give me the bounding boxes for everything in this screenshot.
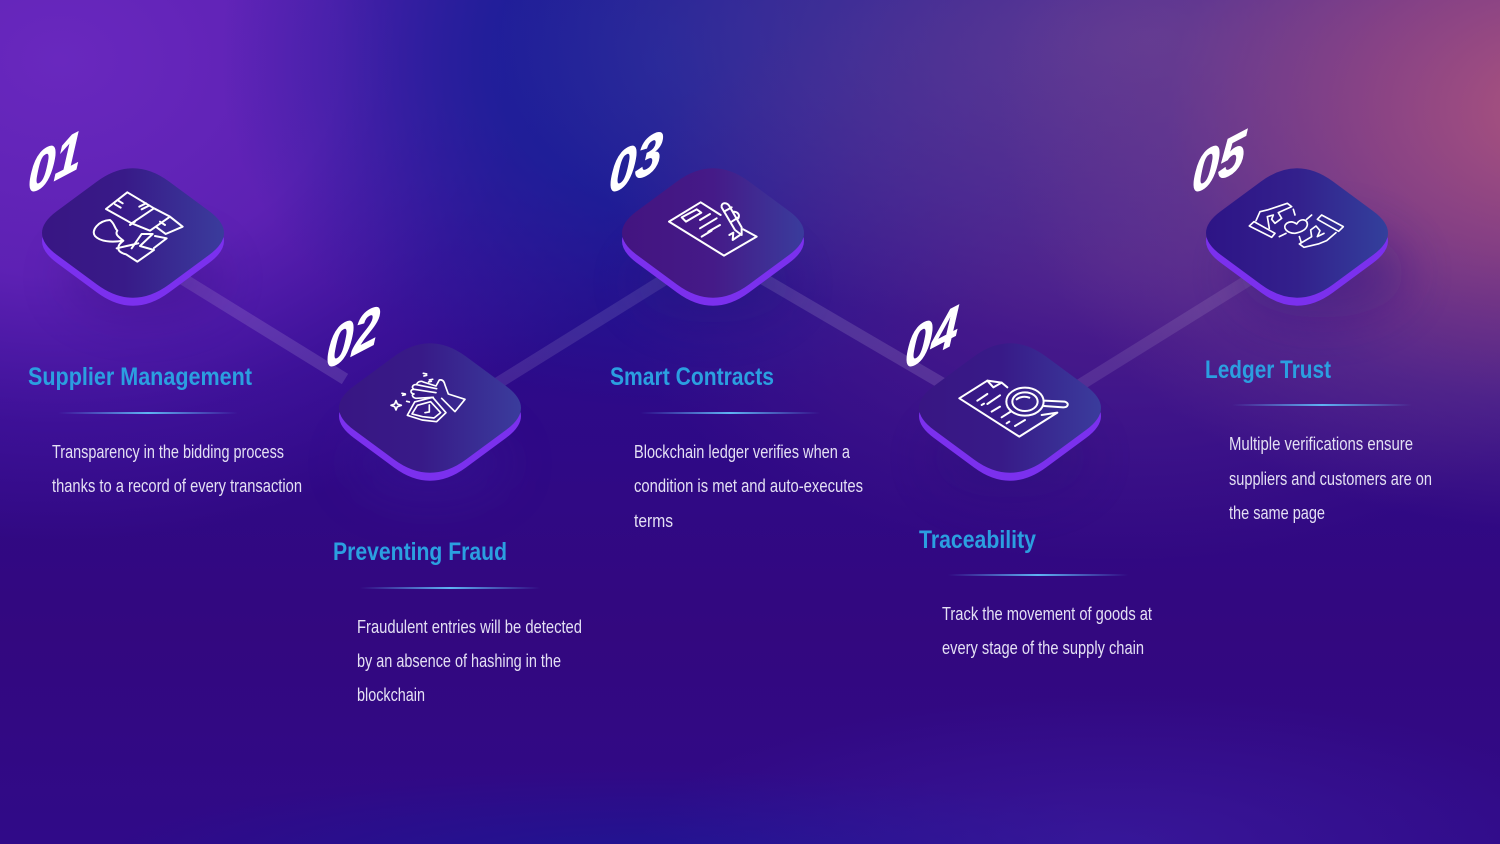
platform 5 xyxy=(1206,168,1407,318)
platform 4 xyxy=(919,343,1101,498)
divider xyxy=(1232,404,1412,406)
description xyxy=(634,442,863,531)
description xyxy=(942,604,1152,658)
heading: Supplier Management xyxy=(28,363,253,391)
description xyxy=(357,617,582,705)
description: terms xyxy=(634,511,673,531)
description: Multiple verifications ensure xyxy=(1229,434,1413,454)
divider xyxy=(58,412,238,414)
description: Transparency in the bidding process xyxy=(52,442,284,462)
divider xyxy=(360,587,540,589)
heading: Preventing Fraud xyxy=(333,538,507,566)
platform 2 xyxy=(339,343,521,503)
connector lines xyxy=(175,274,1255,388)
description: the same page xyxy=(1229,503,1325,523)
description: Track the movement of goods at xyxy=(942,604,1152,624)
description: every stage of the supply chain xyxy=(942,638,1144,658)
number 05: 05 xyxy=(1190,118,1249,208)
icon: hands and heart xyxy=(1249,203,1343,247)
description xyxy=(1229,434,1432,523)
description: Blockchain ledger verifies when a xyxy=(634,442,851,462)
divider xyxy=(948,574,1128,576)
description xyxy=(52,442,302,496)
platform 1 xyxy=(42,168,224,318)
description: by an absence of hashing in the xyxy=(357,651,561,671)
step 3: smart contracts xyxy=(607,118,863,531)
heading: Ledger Trust xyxy=(1205,356,1332,384)
number 04: 04 xyxy=(903,293,961,383)
step 4: traceability xyxy=(903,293,1152,658)
description: Fraudulent entries will be detected xyxy=(357,617,582,637)
heading: Smart Contracts xyxy=(610,363,774,391)
icon: document and magnifier xyxy=(959,381,1068,437)
divider xyxy=(640,412,820,414)
description: condition is met and auto-executes xyxy=(634,476,863,496)
icon: supplier with boxes xyxy=(94,192,183,262)
step 2: preventing fraud xyxy=(324,293,582,705)
description: thanks to a record of every transaction xyxy=(52,476,302,496)
step 5: ledger trust xyxy=(1190,118,1432,523)
step 1: supplier management xyxy=(26,118,302,496)
icon: hand and shield xyxy=(391,373,465,422)
number 01: 01 xyxy=(26,118,84,208)
heading: Traceability xyxy=(919,526,1036,554)
number 02: 02 xyxy=(324,293,382,383)
icon: contract and pen xyxy=(669,202,757,256)
number 03: 03 xyxy=(607,118,665,208)
platform 3 xyxy=(622,168,804,323)
description: blockchain xyxy=(357,685,425,705)
description: suppliers and customers are on xyxy=(1229,469,1432,489)
